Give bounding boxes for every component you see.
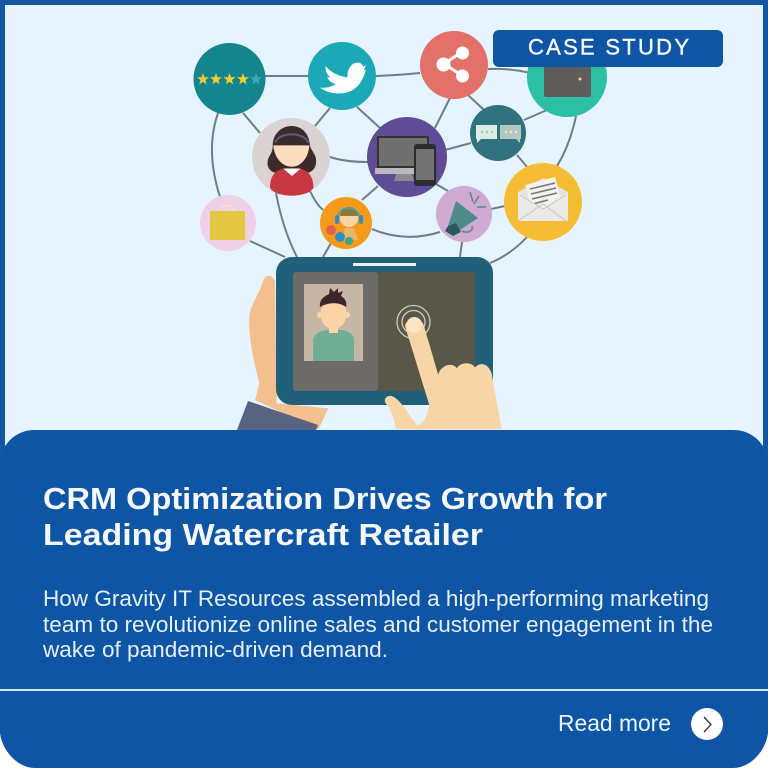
heading: CRM Optimization Drives Growth for [43,481,607,516]
illustration: CRM network and tablet [194,31,607,430]
icon: wallet [527,37,607,117]
description text [42,586,713,662]
heading [43,481,607,552]
icon: support agent [320,197,372,249]
icon: shopping bag [200,195,256,251]
network connector lines [212,69,576,263]
hand tapping the tablet [385,317,502,429]
description text: wake of pandemic-driven demand. [42,637,388,662]
icon: twitter bird [308,42,376,110]
description text: How Gravity IT Resources assembled a high-performing marketing [43,586,709,611]
icon: envelope [504,163,582,241]
icon: computer and phone [367,117,447,197]
read more link: Read more [558,710,671,736]
badge: case study: CASE STUDY [528,34,689,60]
panel: summary [0,430,768,768]
tablet [276,257,493,405]
read more link [558,708,723,740]
icon: star rating [194,43,266,115]
icon: woman avatar [252,118,330,196]
icon: speech bubbles [470,105,526,161]
heading: Leading Watercraft Retailer [43,517,483,552]
hand holding the tablet [249,276,328,429]
icon: arrow button [691,708,723,740]
touch ripple rings [397,306,430,338]
badge: case study [493,30,723,67]
jacket sleeve [237,401,318,430]
profile photo on tablet [304,284,363,361]
icon: megaphone [436,186,492,242]
icon: share [420,31,488,99]
description text: team to revolutionize online sales and customer engagement in the [43,612,713,637]
